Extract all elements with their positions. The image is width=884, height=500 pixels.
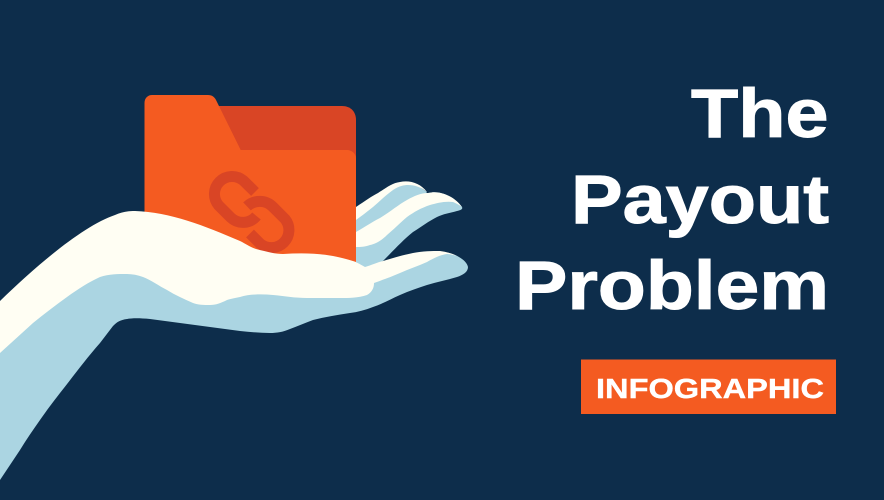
icon: chain link bbox=[214, 176, 289, 248]
title: The bbox=[691, 75, 828, 152]
hand: arm and palm highlight bbox=[0, 211, 457, 353]
illustration: hand holding folder bbox=[0, 95, 468, 480]
title bbox=[515, 75, 829, 324]
hand: back fingers bbox=[356, 181, 462, 268]
folder bbox=[144, 95, 356, 270]
badge: infographic: INFOGRAPHIC bbox=[596, 373, 824, 404]
folder front bbox=[144, 95, 356, 270]
folder back bbox=[210, 106, 356, 200]
title: Problem bbox=[515, 247, 829, 324]
title: Payout bbox=[571, 161, 829, 238]
badge: infographic bbox=[581, 360, 836, 414]
hand: arm and palm shadow bbox=[0, 252, 468, 480]
